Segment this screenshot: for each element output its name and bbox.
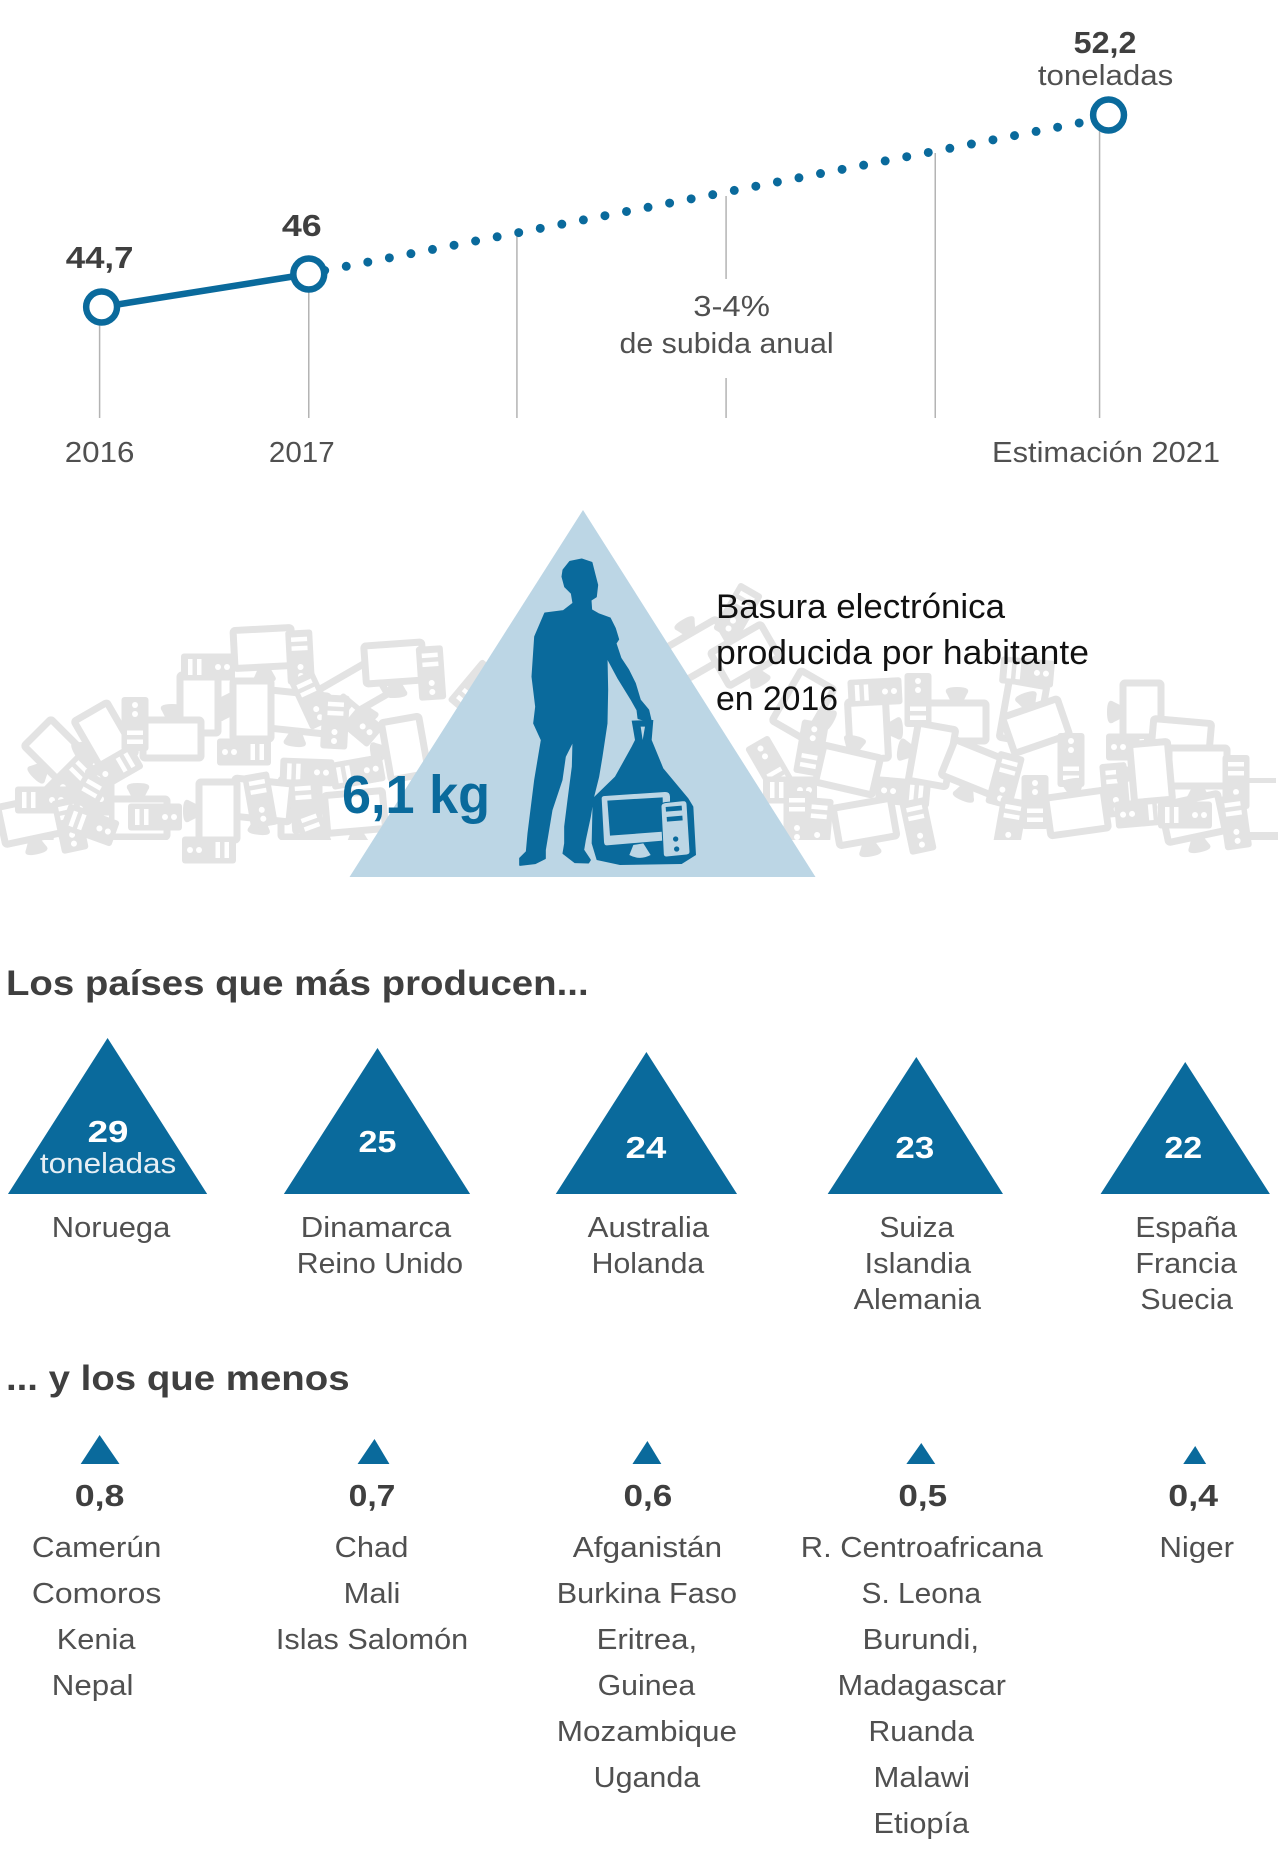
rubbish bag [592,720,696,865]
low countries: 0,5 [801,1443,1044,1840]
description text: Basura electrónica [716,588,1005,626]
low countries: 0,5: R. Centroafricana [801,1532,1044,1564]
axis labels: 2016 [65,437,134,469]
low countries: 0,6: Afganistán [573,1532,722,1564]
low countries: 0,8: 0,8 [75,1478,125,1513]
value 52,2 toneladas: 52,2 [1074,25,1136,60]
low countries: 0,7: Islas Salomón [276,1624,468,1656]
top countries: 24: Holanda [592,1248,705,1280]
top countries: 23: Islandia [865,1248,972,1280]
low countries: 0,5: Ruanda [869,1716,975,1748]
value 52,2 toneladas: toneladas [1038,60,1173,92]
low countries: 0,5: S. Leona [862,1578,982,1610]
top countries: 23 [828,1057,1003,1316]
computer in bag [602,792,690,858]
low countries: 0,5: Madagascar [838,1670,1006,1702]
per-capita figure: 6,1 kg [342,765,490,825]
top countries: 22: España [1135,1212,1238,1244]
low countries: 0,7: Chad [335,1532,408,1564]
top countries: 25 [284,1048,470,1280]
marker 2021 [1093,100,1124,130]
low countries: 0,5: 0,5 [898,1478,947,1513]
top countries: 22: 22 [1164,1130,1202,1165]
axis labels [65,437,1220,469]
vertical guide lines [100,130,1100,418]
marker 2016 [86,292,117,322]
low countries: 0,7 [276,1439,468,1656]
pile of discarded computers [0,582,1278,865]
annotation: annual rise [620,291,834,360]
low countries: 0,4: Niger [1159,1532,1234,1564]
low countries: 0,8: Comoros [32,1578,161,1610]
low countries: 0,8: Nepal [52,1670,133,1702]
low countries: 0,5: Malawi [873,1762,970,1794]
top country: 29: 29 [88,1114,128,1149]
top countries: 24 [556,1052,737,1280]
low countries: 0,6: Guinea [598,1670,696,1702]
heading: top producers: Los países que más producen... [6,964,589,1003]
top countries: 22 [1101,1062,1270,1316]
low countries: 0,6: Eritrea, [597,1624,697,1656]
large light-blue triangle [350,510,816,877]
description text: en 2016 [716,680,838,718]
low countries: 0,5: Burundi, [863,1624,979,1656]
top countries: 25: Reino Unido [297,1248,463,1280]
top country: 29: toneladas [40,1148,176,1180]
description text: producida por habitante [716,634,1089,672]
low countries: 0,4: 0,4 [1168,1478,1219,1513]
low countries: 0,8: Kenia [57,1624,136,1656]
silhouette [520,559,651,865]
description text [716,588,1089,718]
low countries: 0,6: Mozambique [557,1716,737,1748]
axis labels: 2017 [269,437,335,469]
annotation: annual rise: 3-4% [693,291,770,323]
low countries: 0,8 [32,1435,161,1702]
icon: person holding a bag of e-waste [520,559,696,865]
value 52,2 toneladas [1038,25,1173,92]
top countries: 23: Alemania [854,1284,982,1316]
heading: lowest producers: ... y los que menos [6,1359,350,1398]
marker 2017 [293,258,324,290]
top countries: 25: 25 [359,1124,396,1159]
top countries: 24: Australia [588,1212,710,1244]
low countries: 0,7: 0,7 [349,1478,395,1513]
low countries: 0,6: Uganda [594,1762,701,1794]
top countries: 24: 24 [625,1130,667,1165]
low countries: 0,7: Mali [344,1578,400,1610]
top countries: 23: 23 [895,1130,934,1165]
value 46: 46 [282,208,322,243]
annotation: annual rise: de subida anual [620,328,834,360]
axis labels: Estimación 2021 [992,437,1220,469]
top country: 29 [8,1038,207,1244]
top countries: 22: Francia [1135,1248,1238,1280]
line chart: tonnes of e-waste 2016-2021 [65,25,1220,469]
top countries: 25: Dinamarca [301,1212,452,1244]
low countries: 0,6: 0,6 [623,1478,672,1513]
low countries: 0,6 [557,1441,737,1794]
low countries: 0,8: Camerún [32,1532,161,1564]
low countries: 0,4 [1159,1446,1234,1564]
top countries: 23: Suiza [879,1212,955,1244]
low countries: 0,5: Etiopía [873,1808,970,1840]
dotted projection line [325,122,1082,270]
top countries: 22: Suecia [1140,1284,1234,1316]
low countries: 0,6: Burkina Faso [557,1578,737,1610]
solid line 2016-2017 [102,274,309,307]
top country: 29: Noruega [52,1212,171,1244]
value 44,7: 44,7 [66,240,133,275]
